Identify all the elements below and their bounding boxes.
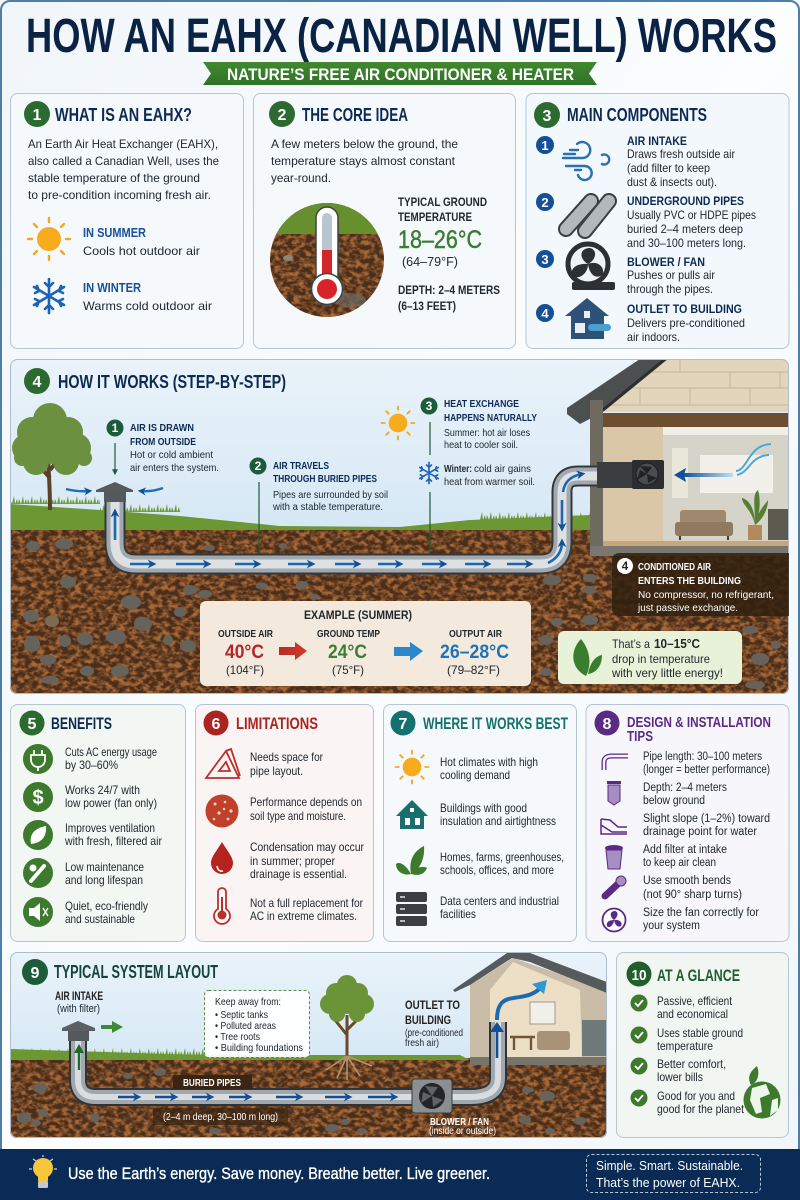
- soil stones: [23, 538, 781, 689]
- intake cap: [62, 1021, 95, 1041]
- heading: design tips: 8: [603, 716, 612, 733]
- benefit: ventilation: with fresh, filtered air: [64, 834, 162, 848]
- limitation: extreme climates: Not a full replacement for: [250, 896, 363, 910]
- limitation: extreme climates: [214, 888, 363, 924]
- core idea text: A few meters below the ground, the: [271, 137, 458, 151]
- heading: what is an EAHX: WHAT IS AN EAHX?: [55, 105, 192, 125]
- heading: benefits: BENEFITS: [51, 714, 112, 733]
- outside air value: (104°F): [226, 663, 264, 677]
- typical ground temperature: [398, 195, 500, 313]
- component 3: blower / fan: through the pipes.: [627, 282, 713, 296]
- component 2: underground pipes: UNDERGROUND PIPES: [627, 196, 744, 208]
- check item 1: [630, 994, 733, 1021]
- tip: depth: [607, 781, 727, 807]
- limitation: condensation: drainage is essential.: [250, 867, 347, 881]
- callout: keep away from: • Tree roots: [215, 1031, 260, 1043]
- component 4: outlet to building: 4: [541, 306, 549, 321]
- arrow: blue: [394, 642, 423, 661]
- climate: hot: Hot climates with high: [440, 755, 538, 769]
- step 4: CONDITIONED AIR: [638, 561, 711, 573]
- component 4: outlet to building: [536, 298, 745, 344]
- icon: leaves: [573, 639, 602, 676]
- benefit: ventilation: Improves ventilation: [65, 821, 155, 835]
- data centers: [396, 892, 559, 926]
- pipe size label: [153, 1108, 288, 1125]
- tip: fan size: your system: [643, 920, 700, 932]
- step 4: ENTERS THE BUILDING: [638, 575, 741, 587]
- panel: main components: [526, 94, 789, 348]
- homes and farms: schools, offices, and more: [440, 863, 554, 877]
- step 3: [382, 398, 537, 552]
- typical ground temperature: DEPTH: 2–4 METERS: [398, 283, 500, 297]
- building: [453, 953, 607, 1065]
- tip: depth: below ground: [643, 795, 705, 807]
- icon: house outlet: [565, 298, 611, 339]
- limitation: space: pipe layout.: [250, 764, 303, 778]
- buried pipes label: BURIED PIPES: [183, 1077, 241, 1089]
- icon: fan: [568, 244, 615, 290]
- check item 2: Uses stable ground: [657, 1026, 743, 1040]
- step 4: just passive exchange.: [637, 602, 738, 614]
- tip: filter: to keep air clean: [643, 857, 716, 869]
- heading: the core idea: THE CORE IDEA: [302, 105, 408, 125]
- tip: pipe length: (longer = better performance): [643, 764, 770, 776]
- step 2: AIR TRAVELS: [273, 460, 329, 472]
- heading: main components: MAIN COMPONENTS: [567, 105, 707, 125]
- heading: what is an EAHX: 1: [33, 107, 42, 124]
- grass: [10, 1048, 470, 1060]
- check item 3: [630, 1057, 726, 1084]
- heading: what is an EAHX: [24, 101, 192, 127]
- component 2: underground pipes: 2: [541, 195, 549, 210]
- step 4: No compressor, no refrigerant,: [638, 589, 774, 601]
- check item 3: lower bills: [657, 1070, 703, 1084]
- air intake label: [55, 991, 103, 1015]
- outside air value: OUTSIDE AIR: [218, 628, 273, 640]
- panel: how it works: [10, 359, 789, 694]
- house: [567, 359, 789, 556]
- icon: wind: [563, 142, 609, 180]
- rising air arrow: [490, 980, 547, 1058]
- ground temp value: [317, 628, 380, 677]
- callout: temperature drop: with very little energy!: [611, 666, 723, 680]
- callout: temperature drop: 10–15°C: [654, 636, 701, 651]
- definition text: to pre-condition incoming fresh air.: [28, 188, 211, 202]
- tip: fan size: [602, 907, 759, 932]
- panel: limitations: [196, 704, 374, 942]
- air flow arrows in pipe: [115, 474, 582, 564]
- tip: slope: [601, 813, 770, 838]
- callout: temperature drop: drop in temperature: [612, 652, 710, 666]
- plant: [742, 490, 768, 540]
- heading: main components: [534, 102, 707, 128]
- intake arrows: [66, 488, 163, 491]
- benefit: quiet: Quiet, eco-friendly: [65, 899, 148, 913]
- soil stones: [17, 1068, 586, 1134]
- climate: hot: cooling demand: [440, 768, 510, 782]
- benefit: quiet: and sustainable: [65, 912, 135, 926]
- arrow: intake direction: [101, 1021, 123, 1033]
- grass: [10, 496, 590, 530]
- limitation: soil: Performance depends on: [250, 795, 362, 809]
- air intake label: AIR INTAKE: [55, 991, 103, 1003]
- data centers: facilities: [440, 907, 476, 921]
- heading: where it works best: WHERE IT WORKS BEST: [423, 714, 568, 733]
- tip: filter: [605, 844, 727, 869]
- callout: keep away from: • Polluted areas: [215, 1020, 276, 1032]
- heading: benefits: [20, 710, 112, 736]
- core idea text: temperature stays almost constant: [271, 154, 456, 168]
- step 1: air enters the system.: [130, 462, 219, 474]
- component 4: outlet to building: Delivers pre-conditioned: [627, 316, 745, 330]
- component 2: underground pipes: [536, 193, 756, 250]
- tip: bends: Use smooth bends: [643, 875, 731, 887]
- step 2: THROUGH BURIED PIPES: [273, 473, 377, 485]
- heading: where it works best: 7: [399, 716, 408, 733]
- sofa: [675, 510, 733, 540]
- check item 1: and economical: [657, 1007, 728, 1021]
- limitation: extreme climates: AC in extreme climates.: [250, 909, 357, 923]
- limitation: condensation: Condensation may occur: [250, 840, 364, 854]
- blower label: BLOWER / FAN: [430, 1116, 489, 1128]
- check item 1: Passive, efficient: [657, 994, 733, 1008]
- icon: winter snowflake: [34, 279, 64, 313]
- callout: keep away from: [204, 990, 310, 1058]
- in winter text: [83, 281, 212, 313]
- benefit: low power: Works 24/7 with: [65, 783, 140, 797]
- step 1: FROM OUTSIDE: [130, 436, 196, 448]
- indoor air arrow: [674, 444, 771, 482]
- outlet to building label: [405, 1000, 463, 1049]
- check item 3: Better comfort,: [657, 1057, 726, 1071]
- step 2: with a stable temperature.: [272, 501, 383, 513]
- step 1: Hot or cold ambient: [130, 449, 213, 461]
- limitation: condensation: [211, 840, 364, 881]
- benefit: ventilation: [23, 820, 162, 850]
- arrow: red: [279, 642, 307, 660]
- in winter text: IN WINTER: [83, 281, 141, 295]
- benefit: low power: $: [32, 787, 44, 809]
- blower unit: [597, 460, 664, 489]
- heading: limitations: LIMITATIONS: [236, 714, 318, 733]
- typical ground temperature: (64–79°F): [402, 255, 458, 269]
- ground temp value: 24°C: [328, 642, 367, 663]
- panel: what is an EAHX: [10, 94, 244, 348]
- component 1: air intake: [536, 136, 735, 189]
- tip: pipe length: Pipe length: 30–100 meters: [643, 751, 762, 763]
- step 3: heat to cooler soil.: [444, 439, 518, 451]
- typical ground temperature: TEMPERATURE: [398, 210, 472, 224]
- check item 2: temperature: [657, 1039, 713, 1053]
- heading: the core idea: 2: [278, 107, 287, 124]
- definition text: [28, 137, 219, 202]
- check item 2: [630, 1026, 743, 1053]
- tip: fan size: Size the fan correctly for: [643, 907, 759, 919]
- air intake cap: [96, 482, 133, 502]
- limitation: space: Needs space for: [250, 750, 323, 764]
- heading: limitations: [204, 710, 318, 736]
- footer callout: [586, 1154, 760, 1192]
- core idea text: year-round.: [271, 171, 331, 185]
- icon: snowflake: [420, 462, 438, 484]
- example box: EXAMPLE (SUMMER): [304, 608, 412, 622]
- example box: [200, 601, 531, 686]
- heading: how it works: [24, 368, 286, 394]
- benefit: quiet: [23, 897, 148, 927]
- homes and farms: [396, 846, 564, 877]
- benefit: maintenance: and long lifespan: [65, 873, 143, 887]
- limitation: space: [206, 749, 323, 778]
- footer callout: That’s the power of EAHX.: [596, 1175, 740, 1190]
- blower label: (inside or outside): [429, 1126, 496, 1137]
- icon: light bulb: [29, 1155, 57, 1188]
- outside air value: 40°C: [225, 642, 264, 663]
- footer banner: [0, 1149, 800, 1200]
- footer callout: Simple. Smart. Sustainable.: [596, 1158, 743, 1173]
- buried pipe with air flow: [115, 474, 600, 564]
- step 3: HAPPENS NATURALLY: [444, 412, 537, 424]
- buried pipe with arrows: [74, 1022, 498, 1097]
- in winter text: Warms cold outdoor air: [83, 299, 212, 313]
- benefit: low power: low power (fan only): [65, 796, 157, 810]
- step 3: HEAT EXCHANGE: [444, 398, 519, 410]
- heading: design tips: [594, 710, 771, 745]
- panel: the core idea: [254, 94, 516, 348]
- heading: the core idea: [269, 101, 408, 127]
- step 2: 2: [255, 459, 262, 473]
- tip: slope: drainage point for water: [643, 826, 757, 838]
- step 4: 4: [622, 561, 629, 573]
- heading: how it works: HOW IT WORKS (STEP-BY-STEP): [58, 372, 286, 392]
- step 1: [106, 420, 219, 474]
- air intake label: (with filter): [57, 1003, 100, 1015]
- callout: keep away from: • Building foundations: [215, 1042, 303, 1054]
- tree with roots: [320, 975, 374, 1080]
- outlet to building label: BUILDING: [405, 1015, 451, 1027]
- callout: keep away from: Keep away from:: [215, 996, 281, 1008]
- tip: bends: [605, 875, 742, 901]
- subtitle ribbon: NATURE’S FREE AIR CONDITIONER & HEATER: [227, 66, 574, 84]
- side table: [768, 509, 789, 540]
- component 3: blower / fan: Pushes or pulls air: [627, 268, 715, 282]
- panel: where it works best: [384, 704, 576, 942]
- output air value: [440, 628, 509, 677]
- heading: how it works: 4: [33, 374, 42, 391]
- definition text: also called a Canadian Well, uses the: [28, 154, 219, 168]
- component 3: blower / fan: BLOWER / FAN: [627, 257, 705, 269]
- component 4: outlet to building: air indoors.: [627, 330, 680, 344]
- check item 4: Good for you and: [657, 1089, 735, 1103]
- in summer text: IN SUMMER: [83, 226, 146, 240]
- component 1: air intake: dust & insects out).: [627, 175, 717, 189]
- blower unit: [412, 1079, 452, 1113]
- component 3: blower / fan: [536, 244, 715, 296]
- icon: sun: [382, 407, 414, 439]
- tip: filter: Add filter at intake: [643, 844, 727, 856]
- panel: design and installation tips: [586, 704, 789, 942]
- limitation: soil: [206, 794, 362, 828]
- heading: typical system layout: 9: [31, 965, 40, 982]
- panel: typical system layout: [10, 952, 607, 1138]
- core idea text: [271, 137, 458, 185]
- buildings: Buildings with good: [440, 801, 527, 815]
- callout: temperature drop: That’s a: [612, 637, 650, 651]
- step 3: Winter:: [444, 463, 472, 475]
- icon: pipes: [566, 201, 609, 231]
- step 2: Pipes are surrounded by soil: [273, 489, 388, 501]
- outlet to building label: fresh air): [405, 1038, 439, 1049]
- panel: benefits: [10, 704, 186, 942]
- panel: at a glance: [616, 952, 788, 1138]
- in summer text: Cools hot outdoor air: [83, 244, 200, 258]
- in summer text: [83, 226, 200, 258]
- output air value: OUTPUT AIR: [449, 628, 502, 640]
- buildings: insulation and airtightness: [440, 814, 556, 828]
- heading: benefits: 5: [28, 716, 37, 733]
- footer slogan: Use the Earth’s energy. Save money. Breathe better. Live greener.: [68, 1165, 490, 1183]
- component 2: underground pipes: Usually PVC or HDPE pipes: [627, 208, 756, 222]
- data centers: Data centers and industrial: [440, 894, 559, 908]
- step 3: cold air gains: [474, 463, 531, 475]
- callout: temperature drop: [558, 631, 742, 684]
- heading: limitations: 6: [212, 716, 221, 733]
- tip: depth: Depth: 2–4 meters: [643, 782, 727, 794]
- buildings: [396, 800, 556, 829]
- tip: pipe length: [604, 751, 770, 776]
- benefit: energy: by 30–60%: [65, 758, 118, 772]
- heading: at a glance: 10: [632, 967, 646, 984]
- benefit: energy: [23, 744, 157, 774]
- component 1: air intake: (add filter to keep: [627, 161, 710, 175]
- ground temp value: (75°F): [332, 663, 364, 677]
- outside air value: [218, 628, 273, 677]
- heading: typical system layout: TYPICAL SYSTEM LAYOUT: [54, 962, 218, 982]
- icon: globe with leaf: [744, 1066, 780, 1118]
- component 1: air intake: Draws fresh outside air: [627, 147, 735, 161]
- step 2: [250, 458, 388, 553]
- definition text: An Earth Air Heat Exchanger (EAHX),: [28, 137, 218, 151]
- output air value: 26–28°C: [440, 642, 509, 663]
- component 4: outlet to building: OUTLET TO BUILDING: [627, 304, 742, 316]
- heading: where it works best: [390, 710, 568, 736]
- limitation: soil: soil type and moisture.: [250, 809, 346, 823]
- outlet to building label: (pre-conditioned: [405, 1028, 463, 1039]
- check item 4: [630, 1089, 745, 1116]
- tip: slope: Slight slope (1–2%) toward: [643, 813, 770, 825]
- ground temp value: GROUND TEMP: [317, 628, 380, 640]
- heading: typical system layout: [22, 959, 218, 985]
- icon: ground thermometer: [268, 199, 386, 318]
- typical ground temperature: TYPICAL GROUND: [398, 195, 487, 209]
- definition text: stable temperature of the ground: [28, 171, 200, 185]
- heading: at a glance: AT A GLANCE: [657, 966, 740, 985]
- blower label: [429, 1116, 496, 1137]
- tip: bends: (not 90° sharp turns): [643, 889, 742, 901]
- component 3: blower / fan: 3: [541, 252, 549, 267]
- heading: design tips: TIPS: [627, 728, 653, 745]
- check item 4: good for the planet: [657, 1102, 745, 1116]
- benefit: low power: [23, 782, 157, 812]
- climate: hot: [396, 751, 538, 783]
- component 1: air intake: 1: [541, 138, 549, 153]
- homes and farms: Homes, farms, greenhouses,: [440, 850, 564, 864]
- component 2: underground pipes: and 30–100 meters long.: [627, 236, 746, 250]
- heading: at a glance: [626, 962, 740, 986]
- typical ground temperature: 18–26°C: [398, 226, 482, 254]
- outlet to building label: OUTLET TO: [405, 1000, 460, 1012]
- pipe size label: (2–4 m deep, 30–100 m long): [163, 1111, 278, 1123]
- typical ground temperature: (6–13 FEET): [398, 299, 456, 313]
- step 1: AIR IS DRAWN: [130, 422, 194, 434]
- component 2: underground pipes: buried 2–4 meters deep: [627, 222, 743, 236]
- callout: keep away from: • Septic tanks: [215, 1009, 268, 1021]
- tree: [12, 403, 92, 510]
- heading: main components: 3: [543, 108, 552, 125]
- step 1: 1: [112, 421, 119, 435]
- benefit: maintenance: Low maintenance: [65, 860, 144, 874]
- icon: summer sun: [28, 218, 70, 260]
- output air value: (79–82°F): [447, 663, 500, 677]
- component 1: air intake: AIR INTAKE: [627, 136, 687, 148]
- benefit: energy: Cuts AC energy usage: [65, 745, 157, 759]
- step 4: [612, 553, 789, 616]
- step 3: heat from warmer soil.: [444, 476, 535, 488]
- limitation: condensation: in summer; proper: [250, 854, 335, 868]
- benefit: maintenance: [23, 858, 144, 888]
- step 3: Summer: hot air loses: [444, 427, 530, 439]
- step 3: 3: [426, 399, 433, 413]
